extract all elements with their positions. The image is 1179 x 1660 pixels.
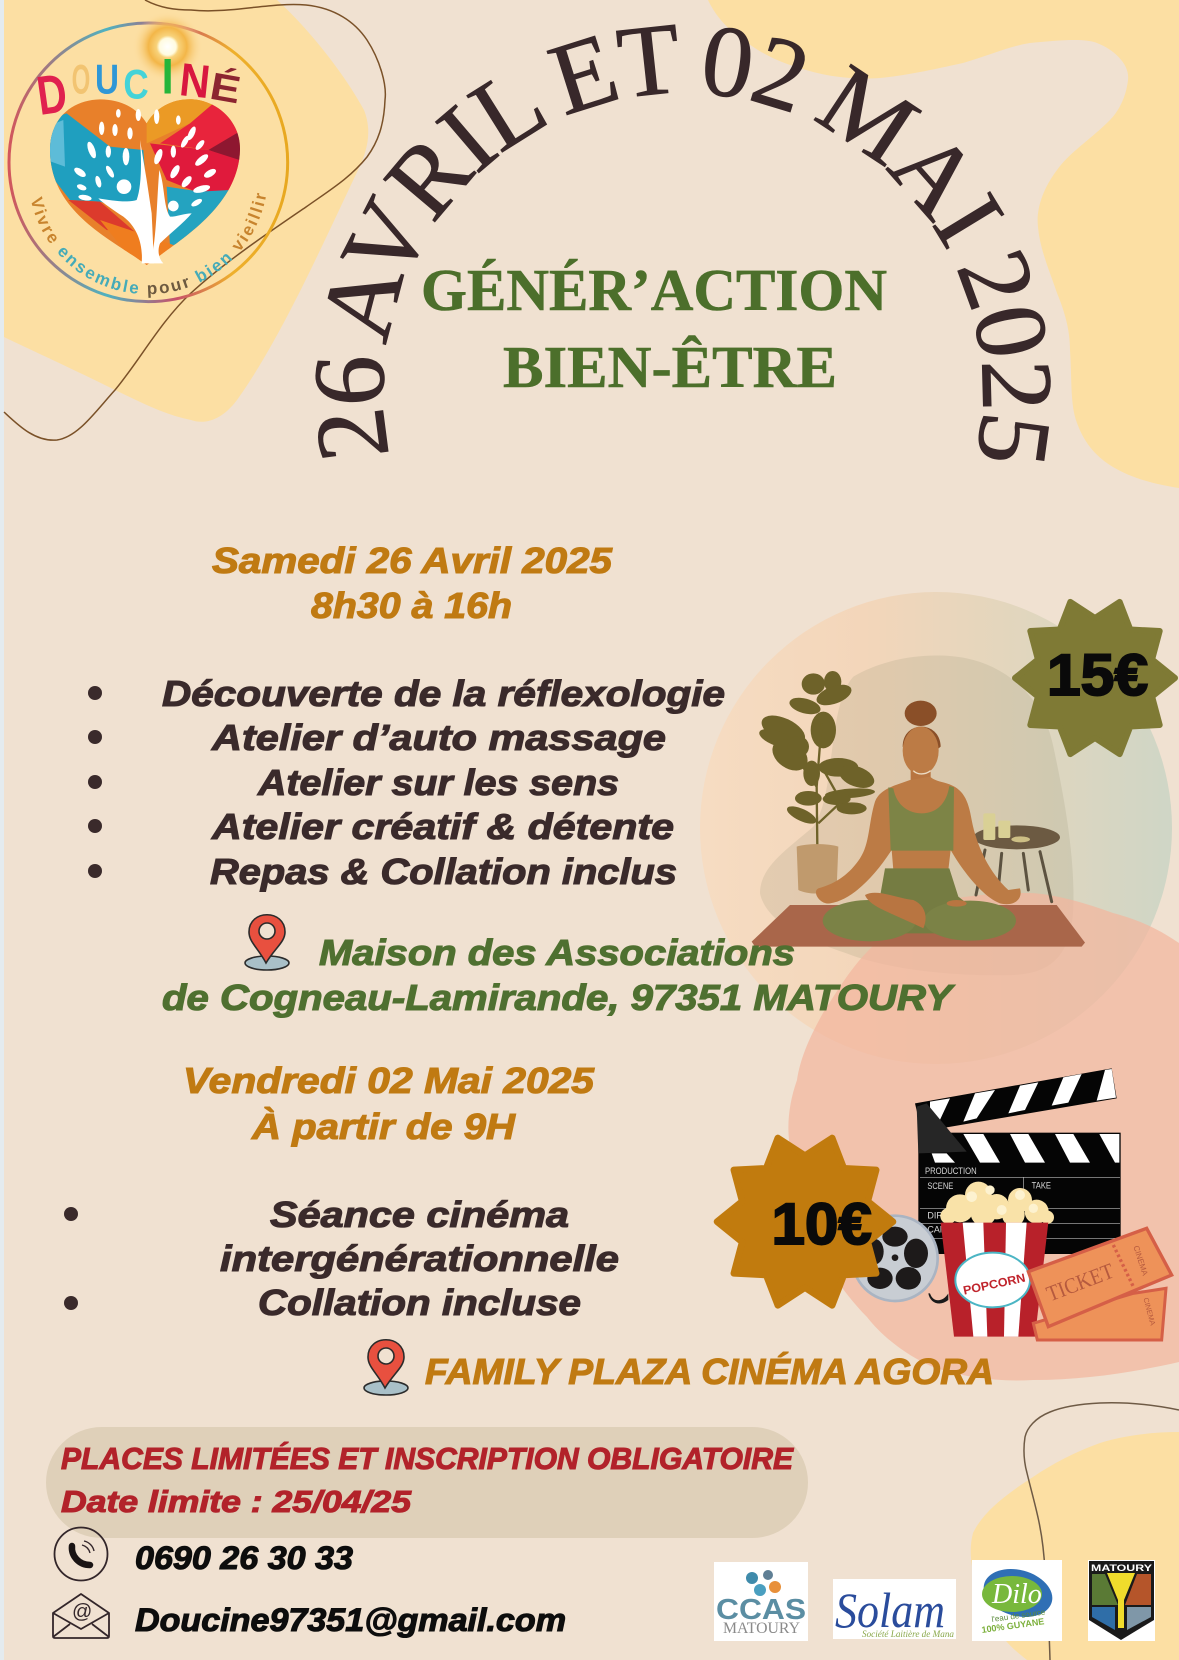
yoga background circle [700,592,1172,1064]
callout: limited places: PLACES LIMITÉES ET INSCRIPTION OBLIGATOIRE [61,1441,794,1476]
logo: Dilo [972,1560,1062,1641]
clapperboard: SCENE [927,1181,953,1191]
tickets: TICKET [1043,1258,1118,1306]
list: saturday activities: Atelier sur les sens [257,762,619,803]
title [421,257,887,400]
location: Maison des Associations [162,915,955,1018]
location: Maison des Associations: Maison des Associations [319,932,795,973]
logo: CCAS Matoury [714,1562,808,1641]
logo ring [9,23,288,302]
callout: limited places: Date limite : 25/04/25 [61,1484,412,1519]
logo tagline: Vivre ensemble pour bien vieillir [32,192,266,298]
list: saturday activities [88,673,725,892]
decorative blob: top right [708,0,1179,488]
logo sun glow [133,12,203,82]
clapperboard: PRODUCTION [925,1166,977,1176]
logo: CCAS Matoury: MATOURY [723,1620,800,1637]
logo: CCAS Matoury: CCAS [716,1594,806,1626]
location: Maison des Associations: de Cogneau-Lamirande, 97351 MATOURY [162,977,955,1018]
logo name: Doucine: C [123,60,149,107]
decorative curve: bottom right [1024,1403,1179,1660]
logo: Doucine [8,16,290,304]
logo name: Doucine: U [95,55,119,102]
icon: phone [54,1528,108,1580]
decorative blob: bottom right [971,1432,1179,1660]
heading: friday date and time [183,1060,595,1147]
logo name: Doucine [33,48,244,127]
heading: friday date and time: À partir de 9H [251,1106,516,1147]
title: BIEN-ÊTRE [503,334,837,400]
logo: Dilo: 100% GUYANE [981,1616,1045,1635]
icon: map pin [245,915,289,970]
logo: Matoury crest: MATOURY [1091,1563,1152,1573]
contact: email: Doucine97351@gmail.com [135,1602,566,1638]
decorative curve: top left [4,0,385,440]
list: friday activities: intergénérationnelle [220,1238,619,1279]
tickets: CINEMA [1141,1297,1157,1326]
price badge: 15 euros: 15€ [1047,643,1148,708]
logo: Matoury crest [1088,1560,1155,1641]
pink background blob [788,893,1179,1380]
film reel [852,1216,948,1303]
list: saturday activities: Découverte de la réflexologie [162,673,725,714]
logo name: Doucine: O [72,55,90,102]
woman figure [816,701,1021,941]
heading: saturday date and time [212,540,613,626]
list: friday activities [64,1194,619,1323]
price badge: 10 euros: 10€ [772,1193,872,1257]
yoga background inner blob [760,656,1073,975]
dates on arc: 26 AVRIL ET 02 MAI 2025 [315,24,1051,461]
callout: limited places [46,1427,808,1538]
logo: Dilo: Dilo [991,1579,1042,1610]
icon: envelope [53,1594,109,1638]
tickets: CINEMA [1131,1245,1150,1277]
title: GÉNÉR’ACTION [421,257,887,323]
logo: Solam: Solam [835,1582,945,1638]
location: cinema [364,1340,994,1395]
list: saturday activities: Repas & Collation inclus [210,851,677,892]
logo: Dilo: l'eau de source [991,1607,1046,1624]
clapperboard: TAKE [1032,1180,1051,1190]
price badge: 10 euros [717,1138,893,1305]
logo heart [50,99,240,265]
popcorn box [940,1182,1054,1337]
clapperboard [915,1068,1121,1254]
side table with candles [973,813,1060,902]
logo name: Doucine: É [207,64,244,112]
yoga mat [752,905,1085,947]
contact: phone: 0690 26 30 33 [135,1540,353,1576]
heading: friday date and time: Vendredi 02 Mai 2025 [183,1060,595,1101]
tickets [1028,1228,1172,1340]
icon: envelope: @ [72,1601,92,1623]
location: cinema: FAMILY PLAZA CINÉMA AGORA [425,1351,994,1392]
illustration: cinema items [717,1068,1172,1340]
logo: Solam: Société Laitière de Mana [862,1629,954,1639]
clapperboard: DIR [927,1210,943,1220]
potted plant [757,671,877,894]
list: friday activities: Collation incluse [258,1282,581,1323]
popcorn box: POPCORN [962,1271,1027,1298]
heading: saturday date and time: 8h30 à 16h [311,585,512,626]
list: friday activities: Séance cinéma [270,1194,569,1235]
heading: saturday date and time: Samedi 26 Avril 2025 [212,540,613,581]
decorative blob: top left [4,0,368,422]
contact: email [53,1594,566,1638]
logo name: Doucine: N [177,53,213,108]
price badge: 15 euros [1015,602,1175,754]
contact: phone [54,1528,353,1580]
logo name: Doucine: I [162,48,174,104]
logo name: Doucine: D [33,61,71,127]
icon: map pin [364,1340,408,1395]
logo tree [73,109,217,263]
illustration: woman meditating [752,671,1085,947]
clapperboard: CAM [927,1225,947,1235]
list: saturday activities: Atelier d’auto massage [211,717,666,758]
list: saturday activities: Atelier créatif & détente [211,806,674,847]
